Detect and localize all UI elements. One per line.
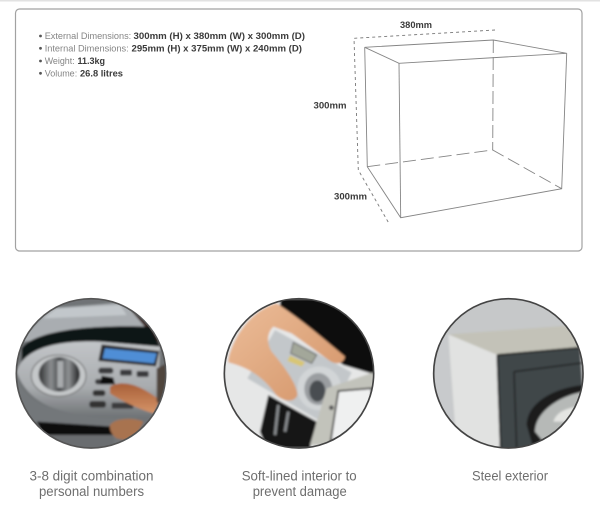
specification list: External Dimensions: [45,30,131,41]
box diagram [354,30,567,224]
dimension labels: 300mm [334,191,367,202]
caption: interior: Soft-lined interior to [242,468,357,484]
specification list: Weight: [45,55,75,66]
caption: combination [30,468,154,500]
dimension labels: 380mm [400,19,432,30]
dimension labels: 300mm [314,100,346,111]
caption: combination: personal numbers [39,484,144,500]
specification list: 26.8 litres [80,68,123,78]
caption: interior: prevent damage [253,484,347,500]
caption: steel: Steel exterior [472,468,548,484]
caption: interior [242,468,357,500]
specification list: 295mm (H) x 375mm (W) x 240mm (D) [132,42,302,54]
panel: dimensions [16,9,582,251]
dimension labels [314,19,432,202]
specification list [39,30,305,78]
photo: steel exterior [430,295,587,452]
photo: camera [223,295,380,452]
specification list: Volume: [45,68,77,78]
caption: combination: 3-8 digit combination [30,468,154,484]
specification list: Internal Dimensions: [45,42,129,54]
photo: keypad [13,295,170,452]
specification list: 300mm (H) x 380mm (W) x 300mm (D) [134,30,305,41]
specification list: 11.3kg [78,55,105,66]
